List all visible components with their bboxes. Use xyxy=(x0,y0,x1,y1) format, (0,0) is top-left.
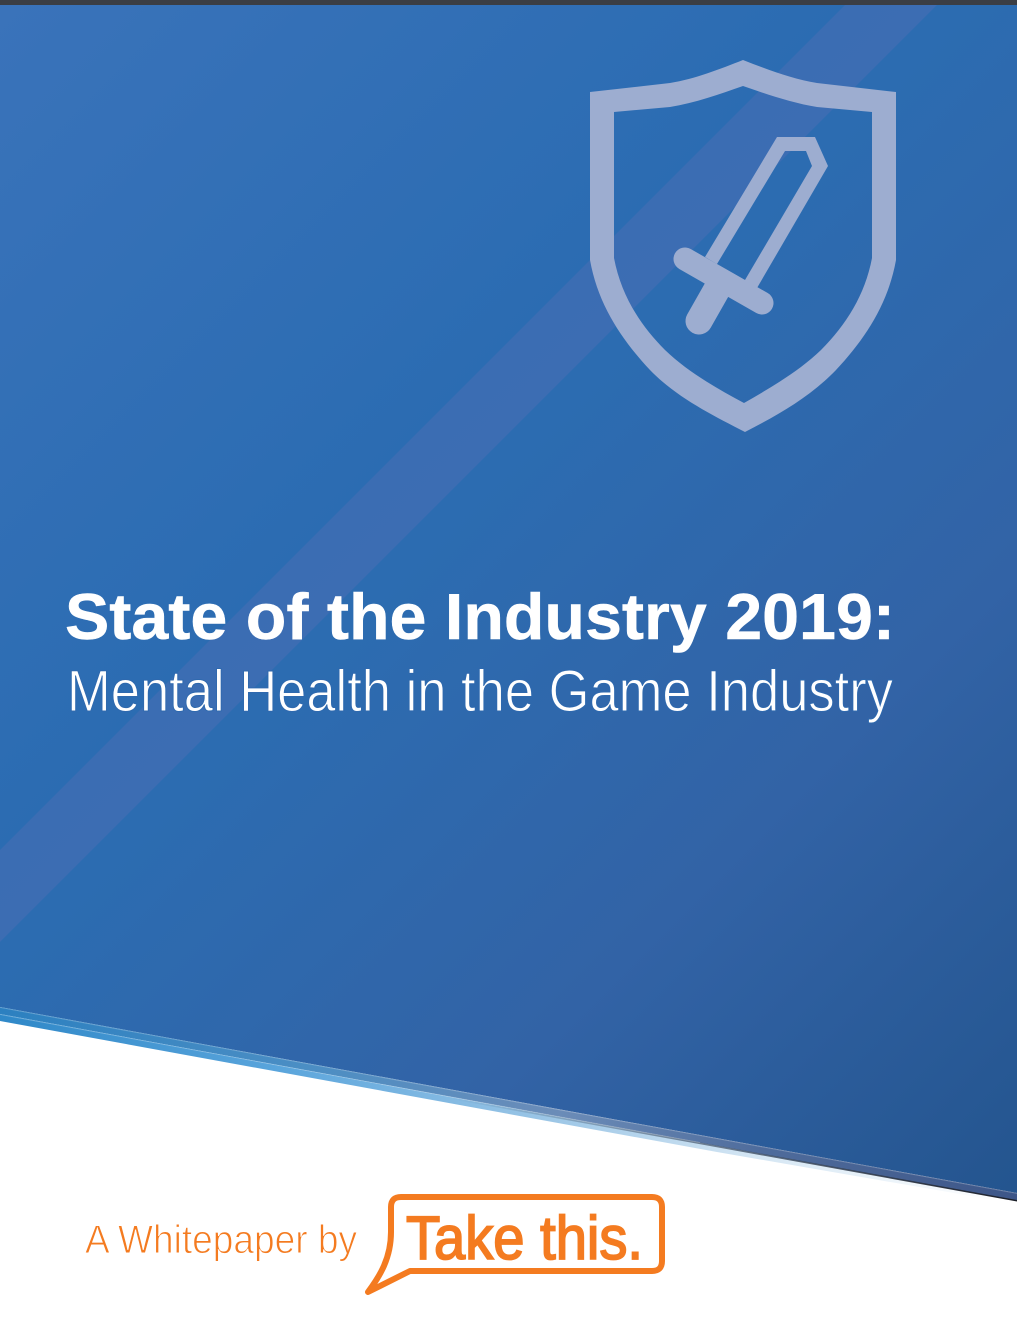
logo: Take this speech bubble xyxy=(368,1197,662,1292)
top dark strip xyxy=(0,0,1017,5)
logo wordmark: Take this. xyxy=(406,1204,643,1272)
byline: A Whitepaper by xyxy=(85,1218,357,1262)
logo bubble outline xyxy=(368,1197,662,1292)
icon: shield with sword xyxy=(590,60,896,432)
shield outline xyxy=(590,60,896,432)
angled swoosh edge xyxy=(0,1007,1017,1202)
sword guard xyxy=(685,259,762,303)
title: State of the Industry 2019: xyxy=(65,580,895,653)
diagonal light band xyxy=(0,5,937,942)
sword handle xyxy=(699,284,720,321)
subtitle: Mental Health in the Game Industry xyxy=(67,659,893,724)
sword blade xyxy=(705,137,828,288)
